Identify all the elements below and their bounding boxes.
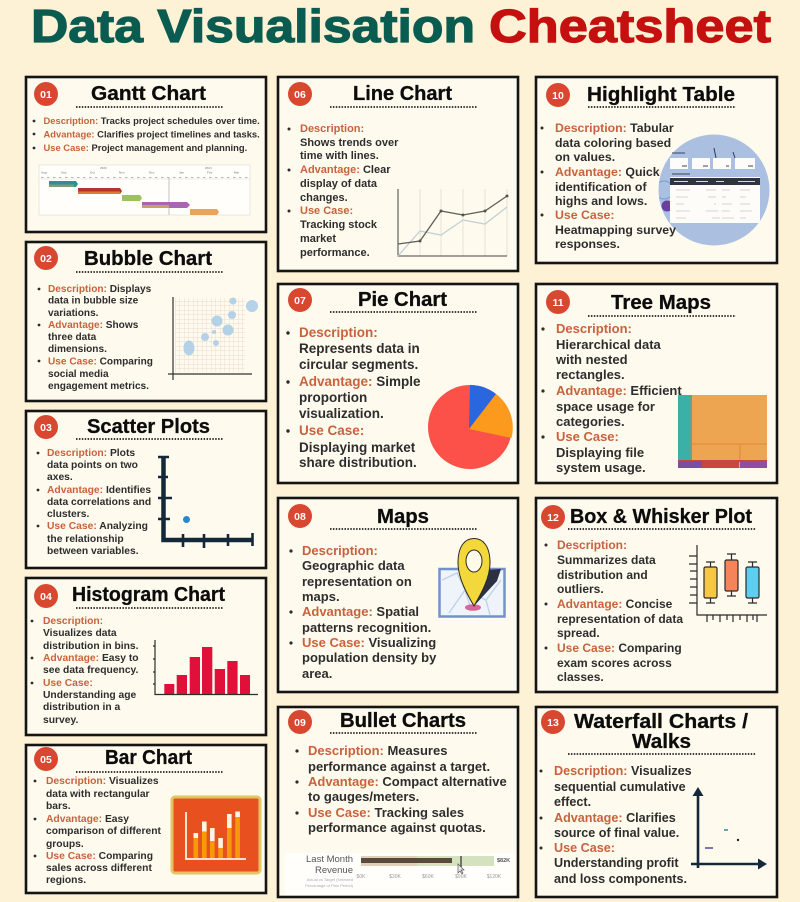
chart: waterfall axes bbox=[691, 787, 767, 870]
badge 04: 04 bbox=[40, 591, 52, 603]
text block: Scatter description: Description: Plots bbox=[47, 448, 135, 459]
heading: Box & Whisker Plot: Box & Whisker Plot bbox=[570, 505, 752, 528]
text block: Highlight description: on values. bbox=[555, 150, 615, 164]
text block: Bullet description: performance against quotas. bbox=[308, 820, 486, 835]
text block: Maps description bbox=[289, 543, 437, 681]
text block: Box plot description: Description: bbox=[557, 538, 627, 552]
text block: Bar description: Advantage: Easy bbox=[46, 814, 129, 825]
text block: Bubble description: engagement metrics. bbox=[48, 381, 149, 392]
text block: Pie description: proportion bbox=[299, 390, 367, 405]
chart: bullet: $30K bbox=[389, 874, 401, 880]
chart: Gantt: 2023 bbox=[100, 166, 107, 170]
heading: Highlight Table: Highlight Table bbox=[587, 83, 735, 106]
badge 12: 12 bbox=[547, 512, 559, 524]
text block: Waterfall description: and loss components. bbox=[554, 872, 687, 886]
text block: Maps description: Advantage: Spatial bbox=[302, 604, 419, 619]
text block: Histogram description: Advantage: Easy to bbox=[43, 653, 139, 664]
heading: Maps: Maps bbox=[377, 505, 429, 528]
text block: Bar description: sales across different bbox=[46, 863, 152, 874]
text block: Maps description: maps. bbox=[302, 589, 340, 604]
title: Cheatsheet bbox=[489, 0, 771, 52]
text block: Histogram description: survey. bbox=[43, 715, 78, 726]
panel: 03 Scatter Plots bbox=[26, 411, 266, 568]
title bbox=[31, 0, 771, 52]
badge 01: 01 bbox=[40, 89, 52, 101]
text block: Tree Maps description: Description: bbox=[556, 321, 632, 336]
text block: Pie description: visualization. bbox=[299, 406, 384, 421]
badge 08 bbox=[288, 504, 312, 528]
chart: bullet: Revenue bbox=[315, 865, 353, 876]
text block: Line description: display of data bbox=[300, 178, 378, 190]
chart: bullet: $90K bbox=[455, 874, 467, 880]
text block: Bubble description: dimensions. bbox=[48, 344, 107, 355]
badge 02 bbox=[34, 246, 58, 270]
text block: Scatter description: Use Case: Analyzing bbox=[47, 521, 148, 532]
chart: bullet: Last Month bbox=[306, 854, 353, 865]
text block: Tree Maps description: space usage for bbox=[556, 399, 655, 414]
text block: Bubble description: Use Case: Comparing bbox=[48, 356, 153, 368]
chart: Gantt: Jan bbox=[179, 170, 184, 174]
text block: Maps description: representation on bbox=[302, 574, 412, 589]
text block: Tree Maps description bbox=[541, 321, 682, 475]
badge 11 bbox=[546, 290, 570, 314]
text block: Histogram description: Use Case: bbox=[43, 678, 93, 689]
text block: Box plot description: classes. bbox=[557, 670, 604, 684]
badge 05: 05 bbox=[40, 754, 52, 766]
text block: Pie description bbox=[286, 325, 421, 470]
text block: Histogram description: distribution in a bbox=[43, 702, 120, 713]
text block: Line description: Tracking stock bbox=[300, 219, 378, 231]
chart: bullet: $60K bbox=[422, 874, 434, 880]
text block: Highlight description bbox=[540, 121, 676, 251]
panel: 05 Bar Chart bbox=[26, 745, 266, 893]
text block: Bar description: comparison of different bbox=[46, 826, 162, 837]
chart: bubble bbox=[168, 297, 258, 380]
text block: Gantt description: Advantage: Clarifies project timelines and tasks. bbox=[44, 128, 260, 140]
chart: bullet: $82K bbox=[497, 858, 510, 864]
heading: Pie Chart: Pie Chart bbox=[358, 288, 447, 311]
illustration: highlight table bbox=[655, 134, 770, 246]
text block: Bubble description: three data bbox=[48, 332, 97, 343]
panel: 08 Maps bbox=[278, 498, 518, 692]
text block: Tree Maps description: Use Case: bbox=[556, 429, 619, 444]
text block: Maps description: population density by bbox=[302, 650, 437, 665]
icon: map pin bbox=[440, 538, 504, 616]
text block: Waterfall description: Use Case: bbox=[554, 841, 615, 855]
badge 09: 09 bbox=[294, 717, 306, 729]
text block: Line description: time with lines. bbox=[300, 150, 379, 162]
text block: Gantt description: Description: Tracks project schedules over time. bbox=[44, 115, 260, 126]
text block: Tree Maps description: Advantage: Efficient bbox=[556, 383, 682, 398]
chart: bullet: Actual vs Target (Selected bbox=[307, 877, 353, 882]
badge 11: 11 bbox=[552, 297, 564, 309]
chart: box and whisker bbox=[689, 545, 767, 622]
text block: Maps description: patterns recognition. bbox=[302, 620, 431, 635]
text block: Box plot description: spread. bbox=[557, 626, 600, 640]
badge 10 bbox=[546, 83, 570, 107]
text block: Highlight description: Use Case: bbox=[555, 208, 614, 222]
badge 06 bbox=[288, 82, 312, 106]
text block: Waterfall description: source of final value. bbox=[554, 826, 679, 840]
text block: Line description: Use Case: bbox=[300, 205, 353, 217]
panel: 02 Bubble Chart bbox=[26, 242, 266, 401]
text block: Waterfall description: effect. bbox=[554, 795, 591, 809]
text block: Gantt description bbox=[33, 115, 260, 153]
text block: Bullet description: performance against a target. bbox=[308, 759, 490, 774]
text block: Highlight description: data coloring based bbox=[555, 136, 671, 150]
text block: Bullet description: Description: Measures bbox=[308, 743, 447, 758]
panel: 01 Gantt Chart bbox=[26, 77, 266, 232]
text block: Pie description: Advantage: Simple bbox=[299, 374, 421, 389]
badge 04 bbox=[34, 584, 58, 608]
badge 02: 02 bbox=[40, 253, 52, 265]
text block: Histogram description: Description: bbox=[43, 616, 103, 627]
text block: Bar description bbox=[34, 776, 162, 886]
text block: Box plot description: exam scores across bbox=[557, 656, 672, 670]
text block: Bullet description bbox=[295, 743, 507, 835]
badge 08: 08 bbox=[294, 511, 306, 523]
text block: Waterfall description: sequential cumulative bbox=[554, 780, 686, 794]
title: Data Visualisation bbox=[31, 0, 475, 52]
panel: 09 Bullet Charts bbox=[278, 707, 518, 897]
text block: Bubble description: Advantage: Shows bbox=[48, 320, 139, 331]
heading: Bullet Charts: Bullet Charts bbox=[340, 709, 466, 732]
text block: Scatter description: clusters. bbox=[47, 509, 89, 520]
badge 03: 03 bbox=[40, 422, 52, 434]
icon: bar chart tile bbox=[172, 797, 260, 873]
text block: Histogram description: distribution in bins. bbox=[43, 641, 139, 652]
text block: Bar description: bars. bbox=[46, 801, 71, 812]
chart: bullet: $0K bbox=[357, 874, 366, 880]
chart: Gantt: Feb bbox=[207, 170, 213, 174]
badge 12 bbox=[541, 505, 565, 529]
heading: Waterfall Charts / Walks bbox=[574, 710, 748, 753]
text block: Box plot description: Use Case: Comparing bbox=[557, 641, 682, 655]
chart: bullet bbox=[285, 853, 515, 895]
panel: 12 Box & Whisker Plot bbox=[536, 498, 777, 692]
badge 06: 06 bbox=[294, 89, 306, 101]
text block: Pie description: Represents data in bbox=[299, 341, 420, 356]
badge 10: 10 bbox=[552, 90, 564, 102]
text block: Highlight description: Advantage: Quick bbox=[555, 165, 660, 179]
text block: Gantt description: Use Case: Project management and planning. bbox=[44, 142, 247, 153]
text block: Highlight description: responses. bbox=[555, 237, 620, 251]
chart: treemap bbox=[678, 395, 767, 468]
text block: Pie description: Description: bbox=[299, 325, 378, 340]
badge 13: 13 bbox=[547, 717, 559, 729]
text block: Highlight description: highs and lows. bbox=[555, 194, 647, 208]
text block: Waterfall description: Understanding profit bbox=[554, 856, 679, 870]
panel: 10 Highlight Table bbox=[536, 77, 777, 263]
text block: Bubble description: variations. bbox=[48, 308, 99, 319]
text block: Waterfall description bbox=[540, 764, 692, 886]
heading: Scatter Plots: Scatter Plots bbox=[87, 415, 210, 438]
text block: Scatter description: the relationship bbox=[47, 534, 124, 545]
chart: bullet: $120K bbox=[487, 874, 502, 880]
text block: Bubble description bbox=[38, 284, 153, 392]
text block: Pie description: Use Case: bbox=[299, 423, 364, 438]
badge 13 bbox=[541, 710, 565, 734]
heading: Line Chart: Line Chart bbox=[353, 82, 452, 105]
text block: Box plot description: outliers. bbox=[557, 582, 604, 596]
text block: Histogram description: Visualizes data bbox=[43, 628, 117, 639]
text block: Histogram description: Understanding age bbox=[43, 690, 137, 701]
text block: Tree Maps description: with nested bbox=[555, 352, 628, 367]
panel: 13 Waterfall Charts / Walks bbox=[536, 707, 777, 897]
text block: Waterfall description: Advantage: Clarifies bbox=[554, 811, 676, 825]
text block: Line description: changes. bbox=[300, 192, 348, 204]
heading: Bubble Chart: Bubble Chart bbox=[84, 247, 212, 270]
chart: Gantt: Sep bbox=[61, 170, 67, 174]
text block: Tree Maps description: rectangles. bbox=[556, 367, 625, 382]
text block: Pie description: circular segments. bbox=[299, 357, 418, 372]
chart: Gantt: Oct bbox=[90, 170, 95, 174]
text block: Maps description: Use Case: Visualizing bbox=[302, 635, 436, 650]
text block: Maps description: Geographic data bbox=[302, 558, 405, 573]
badge 01 bbox=[34, 82, 58, 106]
text block: Bar description: regions. bbox=[46, 875, 86, 886]
text block: Bubble description: social media bbox=[48, 369, 109, 380]
panel: 07 Pie Chart bbox=[278, 284, 518, 483]
text block: Bar description: groups. bbox=[46, 839, 84, 850]
text block: Highlight description: Heatmapping survey bbox=[555, 223, 676, 237]
heading: Bar Chart: Bar Chart bbox=[105, 746, 192, 769]
text block: Bar description: Use Case: Comparing bbox=[46, 851, 153, 862]
chart: Gantt bbox=[39, 165, 250, 215]
heading: Waterfall Charts / Walks: Waterfall Charts / bbox=[574, 710, 748, 733]
chart: pie bbox=[428, 385, 513, 469]
chart: histogram bbox=[153, 640, 258, 694]
text block: Scatter description: Advantage: Identifies bbox=[47, 485, 151, 496]
text block: Tree Maps description: system usage. bbox=[556, 460, 646, 475]
heading: Waterfall Charts / Walks: Walks bbox=[632, 730, 691, 753]
chart: Gantt: Aug bbox=[41, 170, 47, 174]
heading: Tree Maps: Tree Maps bbox=[611, 291, 711, 314]
text block: Line description: Advantage: Clear bbox=[300, 164, 391, 176]
text block: Histogram description bbox=[31, 616, 139, 726]
badge 07 bbox=[288, 288, 312, 312]
chart: Gantt: 2024 bbox=[205, 166, 212, 170]
panel: 04 Histogram Chart bbox=[26, 578, 266, 735]
text block: Box plot description bbox=[544, 538, 683, 684]
text block: Highlight description: identification of bbox=[555, 180, 647, 194]
chart: bullet: Percentage of Plan Period) bbox=[305, 883, 354, 888]
text block: Bubble description: Description: Displays bbox=[48, 284, 152, 295]
text block: Line description: Description: bbox=[300, 123, 364, 135]
text block: Bar description: Description: Visualizes bbox=[46, 776, 159, 787]
chart: Gantt: Dec bbox=[149, 170, 155, 174]
chart: line bbox=[398, 189, 508, 256]
text block: Box plot description: representation of data bbox=[557, 612, 683, 626]
chart: scatter axes and point bbox=[158, 456, 253, 548]
badge 05 bbox=[34, 747, 58, 771]
text block: Line description: Shows trends over bbox=[300, 137, 399, 149]
text block: Maps description: area. bbox=[302, 666, 332, 681]
text block: Bar description: data with rectangular bbox=[46, 789, 150, 800]
text block: Box plot description: Summarizes data bbox=[557, 553, 656, 567]
badge 03 bbox=[34, 415, 58, 439]
text block: Line description: market bbox=[300, 233, 336, 245]
text block: Tree Maps description: Hierarchical data bbox=[556, 337, 662, 352]
badge 07: 07 bbox=[294, 295, 306, 307]
text block: Pie description: share distribution. bbox=[299, 455, 417, 470]
heading: Histogram Chart: Histogram Chart bbox=[72, 583, 225, 606]
text block: Bullet description: Use Case: Tracking sales bbox=[308, 805, 464, 820]
text block: Pie description: Displaying market bbox=[299, 440, 416, 455]
text block: Histogram description: see data frequency. bbox=[43, 665, 139, 676]
text block: Bullet description: Advantage: Compact alternative bbox=[308, 774, 507, 789]
text block: Highlight description: Description: Tabular bbox=[555, 121, 674, 135]
text block: Scatter description: data points on two bbox=[47, 460, 138, 471]
text block: Bullet description: to gauges/meters. bbox=[308, 789, 419, 804]
heading: Gantt Chart: Gantt Chart bbox=[91, 82, 206, 105]
text block: Scatter description: between variables. bbox=[47, 546, 139, 557]
text block: Line description bbox=[288, 123, 399, 259]
text block: Scatter description: data correlations and bbox=[47, 497, 151, 508]
text block: Line description: performance. bbox=[300, 247, 370, 259]
text block: Scatter description: axes. bbox=[47, 472, 73, 483]
text block: Bubble description: data in bubble size bbox=[48, 296, 139, 306]
text block: Tree Maps description: categories. bbox=[556, 414, 625, 429]
text block: Box plot description: distribution and bbox=[557, 568, 648, 582]
text block: Waterfall description: Description: Visualizes bbox=[554, 764, 692, 778]
text block: Scatter description bbox=[37, 448, 151, 557]
text block: Maps description: Description: bbox=[302, 543, 378, 558]
chart: Gantt: Nov bbox=[119, 170, 125, 174]
chart: Gantt: Mar bbox=[234, 170, 240, 174]
text block: Tree Maps description: Displaying file bbox=[556, 445, 644, 460]
panel: 11 Tree Maps bbox=[536, 284, 777, 483]
text block: Box plot description: Advantage: Concise bbox=[557, 597, 673, 611]
panel: 06 Line Chart bbox=[278, 77, 518, 271]
badge 09 bbox=[288, 710, 312, 734]
